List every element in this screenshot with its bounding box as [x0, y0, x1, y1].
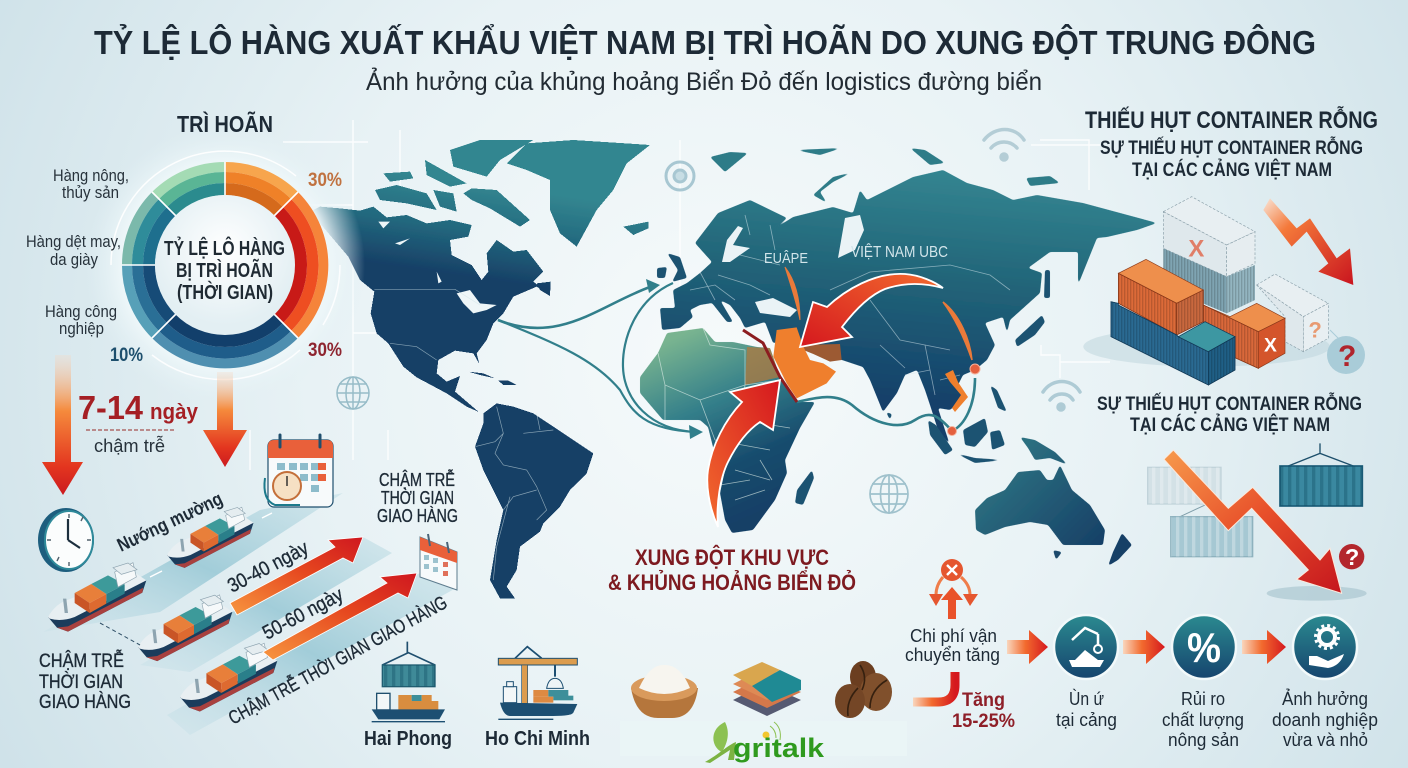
label: delivery delay right	[377, 469, 458, 526]
label: delivery delay left: THỜI GIAN	[39, 671, 123, 693]
label: quality risk: nông sản	[1168, 730, 1239, 750]
icon: calendar with clock	[264, 435, 333, 507]
arrow: left vertical down	[42, 355, 83, 495]
question bubble	[1330, 330, 1340, 340]
donut category labels: nghiệp	[59, 319, 104, 338]
light blue container	[1171, 505, 1253, 557]
donut centre label: TỶ LỆ LÔ HÀNG	[164, 236, 285, 260]
rotated lane labels: Nướng mường	[114, 489, 226, 557]
route nodes	[948, 364, 980, 436]
icon: question bubble: ?	[1338, 340, 1356, 373]
donut glow	[85, 125, 365, 405]
map: Southeast Asian islands	[795, 270, 1050, 505]
label: SME impact	[1272, 688, 1378, 750]
tech grid lines	[250, 120, 1110, 470]
container stack illustration	[1083, 197, 1340, 385]
rotated lane labels: 30-40 ngày	[224, 537, 312, 597]
donut centre label: (THỜI GIAN)	[177, 280, 273, 304]
map: country borders	[690, 215, 1010, 395]
panel heading: container shortage: SỰ THIẾU HỤT CONTAINER RỖNG	[1100, 137, 1363, 159]
arrow: centre vertical down	[203, 372, 247, 467]
orange upper container	[1118, 259, 1203, 335]
arrow shadow	[1267, 586, 1367, 601]
orange lower container	[1203, 303, 1285, 368]
label: shipping cost rises: Chi phí vận	[910, 626, 997, 646]
label: delivery delay right: GIAO HÀNG	[377, 506, 458, 526]
icon: rice bowl	[631, 665, 698, 718]
donut centre label	[164, 236, 285, 304]
label: quality risk	[1162, 689, 1244, 750]
icon: question bubble	[1327, 336, 1365, 374]
label: port congestion	[1056, 688, 1117, 730]
donut category labels: Hàng nông,	[53, 166, 129, 185]
delay 7-14 days: 7-14	[78, 389, 144, 426]
donut centre label: BỊ TRÌ HOÃN	[176, 259, 273, 282]
delay 7-14 days	[78, 389, 199, 456]
donut category labels: da giày	[50, 250, 98, 269]
Red Sea line	[743, 330, 797, 402]
circle icon: quality risk: %	[1187, 624, 1221, 671]
label: port congestion: Ùn ứ	[1069, 688, 1104, 709]
conflict heading: XUNG ĐỘT KHU VỰC	[635, 545, 829, 570]
icon: textiles	[733, 662, 801, 716]
cross on faded container: X	[1188, 236, 1204, 263]
logo: Agritalk	[705, 722, 825, 763]
panel heading: container shortage: TẠI CÁC CẢNG VIỆT NAM	[1132, 159, 1332, 181]
big red arrow from Asia	[800, 274, 943, 347]
arrow: 50-60 days	[263, 573, 417, 660]
brand box	[620, 721, 907, 756]
big red arrow from Africa	[707, 380, 780, 527]
map: British Isles and northern islands	[657, 148, 1060, 282]
label: shipping cost rises: chuyển tăng	[905, 645, 1000, 665]
warning question	[1339, 544, 1364, 570]
label: delivery delay right: THỜI GIAN	[381, 487, 454, 508]
label: rise 15-25%: 15-25%	[952, 711, 1015, 732]
donut outer rings	[111, 151, 340, 380]
icon: globe right	[870, 475, 908, 513]
arrow: curved rise	[913, 672, 955, 702]
ship 2	[167, 507, 254, 568]
label: Ho Chi Minh: Ho Chi Minh	[485, 728, 590, 750]
rotated lane labels	[114, 489, 451, 729]
title: TỶ LỆ LÔ HÀNG XUẤT KHẨU VIỆT NAM BỊ TRÌ HOÃN DO XUNG ĐỘT TRUNG ĐÔNG	[94, 23, 1316, 61]
panel: delay donut	[26, 110, 365, 405]
donut category labels: thủy sản	[62, 183, 119, 202]
icon: signal target	[666, 162, 694, 190]
faded right container	[1257, 274, 1328, 352]
pale container	[1148, 467, 1221, 504]
panel heading: container shortage	[1085, 105, 1378, 181]
arrow: flow 1	[1007, 630, 1048, 664]
map: Greenland	[507, 140, 650, 247]
warning question: ?	[1345, 544, 1359, 570]
shipping routes	[498, 279, 975, 439]
label: delivery delay left: CHẬM TRỄ	[39, 650, 124, 672]
icon: globe left	[337, 377, 369, 409]
donut values: 10%	[110, 345, 143, 366]
map: North America	[310, 140, 551, 414]
white cross: X	[1264, 336, 1277, 357]
donut category labels	[26, 166, 129, 338]
label: SME impact: vừa và nhỏ	[1283, 730, 1368, 750]
label: delivery delay left	[39, 650, 131, 713]
heading: container shortage lower: TẠI CÁC CẢNG VIỆT NAM	[1130, 414, 1330, 436]
map: Arabia highlighted	[773, 327, 842, 398]
label: shipping cost rises	[905, 626, 1000, 665]
dashed ship link	[100, 623, 140, 645]
donut category labels: Hàng công	[45, 302, 117, 321]
map: inland water	[722, 215, 864, 317]
icon: wifi bottom	[1043, 382, 1080, 410]
donut chart	[122, 162, 328, 368]
arrow: 30-40 days	[230, 537, 363, 615]
faded top container	[1163, 197, 1255, 277]
shipping lanes	[43, 493, 458, 735]
rotated lane labels: 50-60 ngày	[259, 584, 347, 644]
donut values	[110, 170, 342, 366]
label: SME impact: doanh nghiệp	[1272, 710, 1378, 730]
map: Africa	[640, 328, 815, 533]
arrow: flow 3	[1242, 630, 1286, 664]
lane dashes	[150, 513, 272, 577]
question on faded right: ?	[1308, 317, 1322, 342]
arrow: zigzag down upper	[1263, 198, 1353, 285]
delay 7-14 days: ngày	[150, 399, 199, 424]
icon: Hai Phong port	[372, 642, 445, 722]
grey blue container	[1163, 248, 1255, 313]
label: quality risk: Rủi ro	[1181, 689, 1225, 709]
hanging blue container	[1280, 443, 1362, 506]
heading: container shortage lower	[1097, 393, 1362, 436]
blue bottom container	[1111, 302, 1235, 385]
conflict heading: & KHỦNG HOẢNG BIỂN ĐỎ	[608, 570, 856, 595]
icon: coffee beans	[835, 661, 892, 718]
donut values: 30%	[308, 170, 342, 191]
small orange arrows	[785, 267, 972, 360]
heading: delay: TRÌ HOÃN	[177, 110, 273, 137]
world map	[310, 140, 1157, 598]
ship 4	[180, 643, 277, 712]
label: rise 15-25%: Tăng	[962, 690, 1005, 711]
arrow: zigzag down lower	[1164, 450, 1342, 593]
label: Vietnam: VIỆT NAM UBC	[851, 242, 948, 261]
label: port congestion: tại cảng	[1056, 710, 1117, 730]
label: quality risk: chất lượng	[1162, 710, 1244, 730]
icon: small calendar	[420, 534, 457, 590]
label: rise 15-25%	[952, 690, 1015, 732]
map: Australia and Oceania	[975, 437, 1132, 566]
icon: clock	[38, 508, 94, 572]
label: SME impact: Ảnh hưởng	[1282, 688, 1368, 709]
delay 7-14 days: chậm trễ	[94, 435, 165, 456]
circle icon: port congestion	[1054, 615, 1118, 679]
logo: Agritalk: gritalk	[733, 733, 825, 763]
circle icon: SME impact	[1293, 615, 1357, 679]
subtitle: Ảnh hưởng của khủng hoảng Biển Đỏ đến logistics đường biển	[366, 66, 1042, 96]
heading: container shortage lower: SỰ THIẾU HỤT CONTAINER RỖNG	[1097, 393, 1362, 415]
conflict heading	[608, 545, 856, 595]
donut values: 30%	[308, 340, 342, 361]
icon: cost warning with arrows	[929, 559, 978, 619]
ship 1	[48, 563, 146, 632]
label: Hai Phong: Hai Phong	[364, 728, 452, 750]
ship 3	[138, 595, 232, 661]
Vietnam highlight	[945, 370, 968, 412]
rotated lane labels: CHẬM TRỄ THỜI GIAN GIAO HÀNG	[225, 592, 451, 729]
label: delivery delay right: CHẬM TRỄ	[379, 469, 455, 490]
label: Europe: EUÂPE	[764, 250, 808, 267]
map: South America	[475, 403, 593, 598]
circle icon: quality risk	[1172, 615, 1236, 679]
donut category labels: Hàng dệt may,	[26, 232, 121, 251]
icon: wifi top	[984, 130, 1024, 160]
map: Eurasia	[660, 170, 1157, 445]
lower container illustration	[1148, 443, 1367, 601]
label: delivery delay left: GIAO HÀNG	[39, 692, 131, 713]
arrow: flow 2	[1123, 630, 1165, 664]
icon: Ho Chi Minh port	[498, 647, 577, 719]
